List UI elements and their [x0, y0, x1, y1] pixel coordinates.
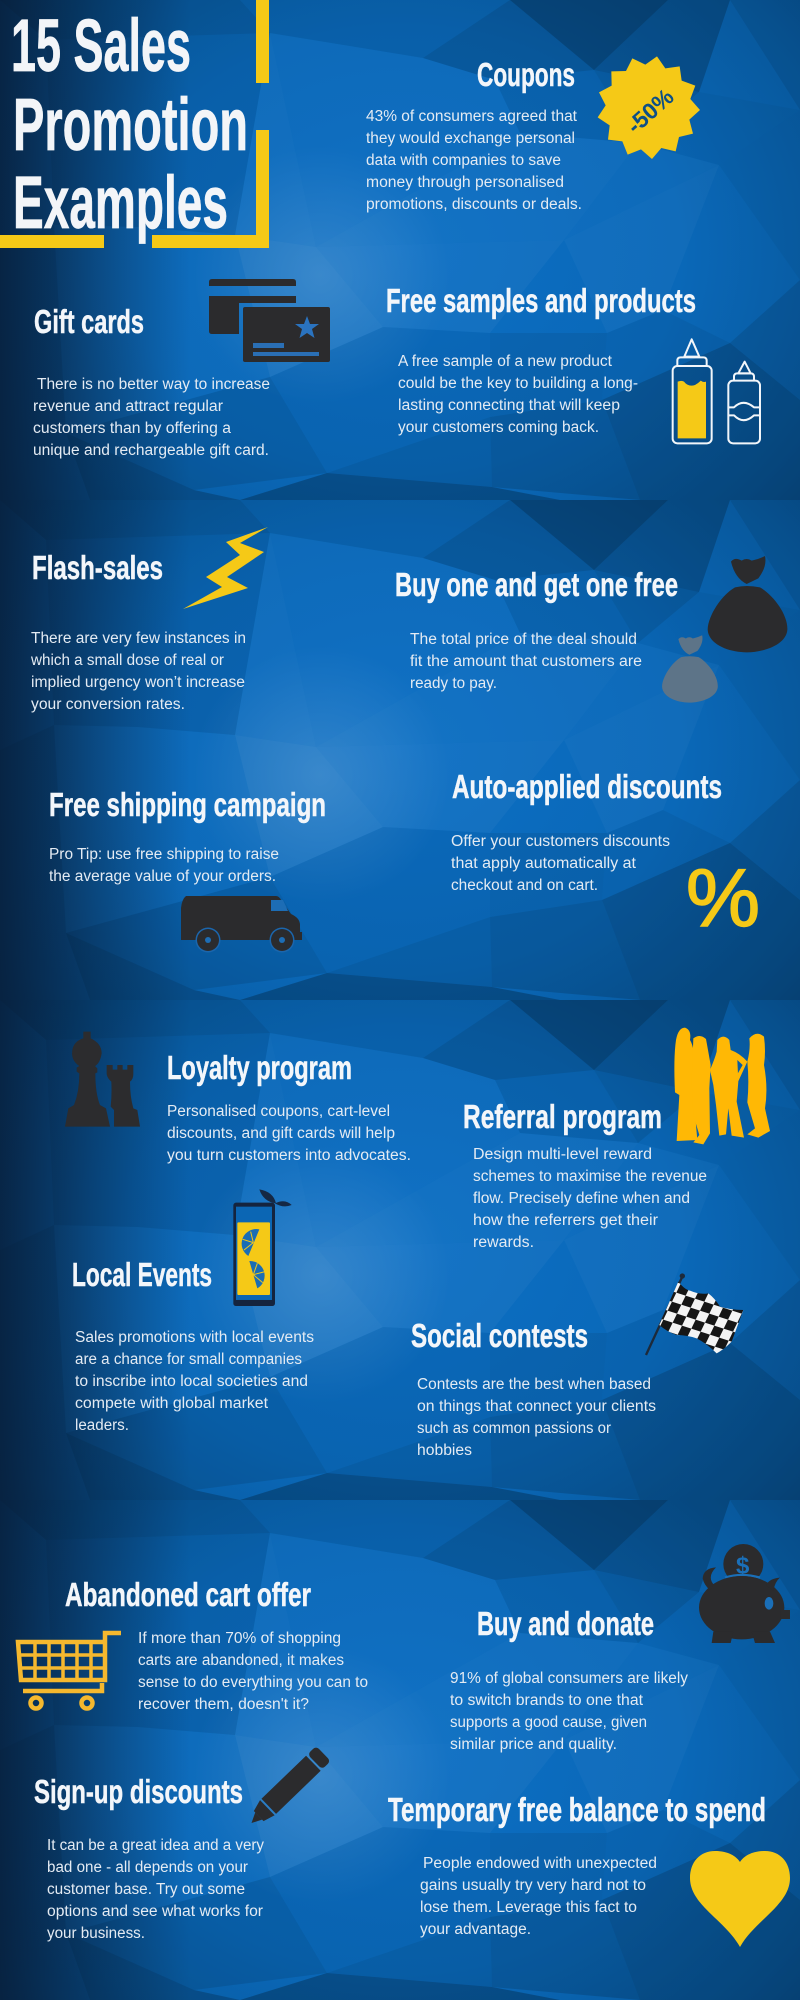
heading: Local Events	[72, 1256, 212, 1293]
body text: the average value of your orders.	[49, 868, 276, 885]
panel: abandoned cart offer	[18, 1576, 368, 1713]
body text: discounts, and gift cards will help	[167, 1125, 395, 1142]
title frame	[0, 0, 269, 248]
body text: leaders.	[75, 1417, 129, 1434]
heading: Sign-up discounts	[34, 1773, 243, 1810]
body text: promotions, discounts or deals.	[366, 196, 582, 213]
body text: fit the amount that customers are	[410, 653, 642, 670]
body text: revenue and attract regular	[33, 398, 223, 415]
body text: they would exchange personal	[366, 130, 575, 147]
heading: Flash-sales	[32, 549, 163, 586]
body text: ready to pay.	[410, 675, 497, 692]
icon: money bags	[662, 556, 787, 703]
panel: buy and donate	[450, 1544, 790, 1753]
body text: customers than by offering a	[33, 420, 231, 437]
icon: gift cards	[209, 279, 330, 362]
panel: loyalty program	[65, 1032, 411, 1164]
body text: that apply automatically at	[451, 855, 637, 872]
body text: your business.	[47, 1925, 145, 1942]
body text	[49, 846, 279, 885]
body text: unique and rechargeable gift card.	[33, 442, 269, 459]
body text: lose them. Leverage this fact to	[420, 1899, 637, 1916]
body text: to inscribe into local societies and	[75, 1373, 308, 1390]
heading: Referral program	[463, 1098, 662, 1135]
icon: van	[181, 896, 302, 952]
body text: compete with global market	[75, 1395, 269, 1412]
body text: on things that connect your clients	[417, 1398, 656, 1415]
title text: Promotion	[13, 83, 248, 166]
body text: sense to do everything you can to	[138, 1674, 368, 1691]
body text: data with companies to save	[366, 152, 561, 169]
panel: free samples and products	[386, 282, 760, 443]
body text: rewards.	[473, 1234, 534, 1251]
icon: lightning bolt	[183, 527, 268, 609]
body text: People endowed with unexpected	[423, 1855, 657, 1872]
icon: heart	[690, 1851, 790, 1947]
panel: social contests	[411, 1273, 743, 1459]
heading: Free shipping campaign	[49, 786, 326, 823]
body text: your advantage.	[420, 1921, 531, 1938]
body text	[451, 833, 670, 894]
heading: Gift cards	[34, 303, 144, 340]
panel: gift cards	[33, 279, 330, 459]
body text: your conversion rates.	[31, 696, 185, 713]
panel: coupons	[366, 56, 700, 213]
body text: checkout and on cart.	[451, 877, 598, 894]
icon: piggy bank: $	[736, 1553, 749, 1580]
panel: temporary free balance to spend	[388, 1791, 790, 1947]
heading: Buy and donate	[477, 1605, 654, 1642]
body text: schemes to maximise the revenue	[473, 1168, 707, 1185]
body text: bad one - all depends on your	[47, 1859, 248, 1876]
title text	[11, 4, 248, 244]
panel: referral program	[463, 1028, 770, 1251]
body text	[420, 1855, 657, 1938]
icon: chess pieces	[65, 1032, 140, 1127]
icon: discount badge: -50%	[621, 83, 679, 139]
body text: to switch brands to one that	[450, 1692, 644, 1709]
body text: money through personalised	[366, 174, 564, 191]
icon: percent sign: %	[686, 853, 760, 944]
body text: 43% of consumers agreed that	[366, 108, 578, 125]
body text: hobbies	[417, 1442, 472, 1459]
body text	[398, 353, 638, 436]
icon: bottles	[673, 339, 760, 443]
icon: discount badge	[598, 56, 700, 159]
body text	[47, 1837, 264, 1942]
heading: Buy one and get one free	[395, 566, 678, 603]
body text	[473, 1146, 707, 1251]
title block	[0, 0, 269, 248]
panel: local events	[72, 1189, 314, 1434]
body text	[410, 631, 642, 692]
body text: Design multi-level reward	[473, 1146, 652, 1163]
body text: your customers coming back.	[398, 419, 599, 436]
heading: Abandoned cart offer	[65, 1576, 311, 1613]
body text: options and see what works for	[47, 1903, 263, 1920]
body text: If more than 70% of shopping	[138, 1630, 341, 1647]
body text	[138, 1630, 368, 1713]
body text: customer base. Try out some	[47, 1881, 245, 1898]
body text: which a small dose of real or	[30, 652, 224, 669]
body text: could be the key to building a long-	[398, 375, 638, 392]
body text: flow. Precisely define when and	[473, 1190, 690, 1207]
heading: Social contests	[411, 1317, 588, 1354]
panel: free shipping campaign	[49, 786, 326, 952]
body text: implied urgency won’t increase	[31, 674, 245, 691]
body text	[167, 1103, 411, 1164]
icon: marker pen	[244, 1746, 331, 1831]
body text	[417, 1376, 656, 1459]
icon: piggy bank	[699, 1544, 790, 1643]
body text: The total price of the deal should	[410, 631, 637, 648]
body text: Pro Tip: use free shipping to raise	[49, 846, 279, 863]
icon: shopping cart	[18, 1633, 121, 1708]
body text: There is no better way to increase	[37, 376, 270, 393]
body text: such as common passions or	[417, 1420, 611, 1437]
body text: lasting connecting that will keep	[398, 397, 620, 414]
panel: buy one and get one free	[395, 556, 787, 703]
panel: auto-applied discounts	[451, 768, 760, 944]
body text: similar price and quality.	[450, 1736, 617, 1753]
icon: checkered flag	[646, 1273, 743, 1355]
body text: Offer your customers discounts	[451, 833, 670, 850]
body text: carts are abandoned, it makes	[138, 1652, 344, 1669]
body text	[33, 376, 270, 459]
body text: you turn customers into advocates.	[167, 1147, 411, 1164]
body text	[366, 108, 582, 213]
title text: 15 Sales	[11, 4, 191, 87]
body text: how the referrers get their	[473, 1212, 658, 1229]
heading: Coupons	[477, 56, 575, 93]
body text: 91% of global consumers are likely	[450, 1670, 688, 1687]
panel: sign-up discounts	[34, 1746, 331, 1942]
heading: Loyalty program	[167, 1049, 352, 1086]
title text: Examples	[13, 161, 228, 244]
icon: drink glass	[233, 1189, 292, 1306]
body text: recover them, doesn't it?	[138, 1696, 309, 1713]
body text: Personalised coupons, cart-level	[167, 1103, 390, 1120]
body text: are a chance for small companies	[75, 1351, 302, 1368]
body text	[450, 1670, 688, 1753]
panel: flash-sales	[30, 527, 268, 713]
body text: supports a good cause, given	[450, 1714, 647, 1731]
icon: group of people	[674, 1028, 770, 1144]
body text	[30, 630, 246, 713]
body text: It can be a great idea and a very	[47, 1837, 264, 1854]
body text: Contests are the best when based	[417, 1376, 651, 1393]
body text: Sales promotions with local events	[75, 1329, 314, 1346]
body text: A free sample of a new product	[398, 353, 613, 370]
body text	[75, 1329, 314, 1434]
body text: There are very few instances in	[31, 630, 246, 647]
body text: gains usually try very hard not to	[420, 1877, 646, 1894]
